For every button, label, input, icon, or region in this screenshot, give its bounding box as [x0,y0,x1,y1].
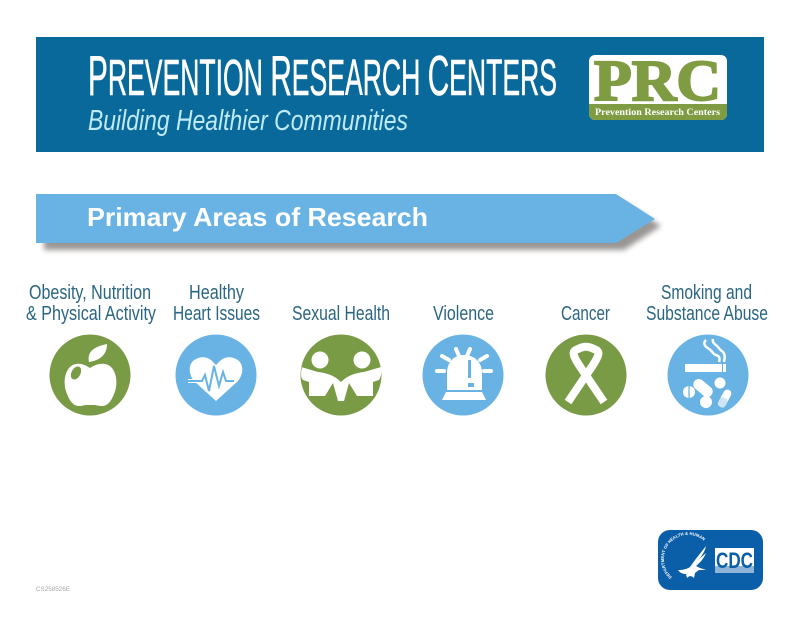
subtitle: Building Healthier Communities [88,105,408,137]
icon: siren [422,334,504,416]
publication code: CS258526E [36,586,71,593]
title: PREVENTION RESEARCH CENTERS [88,44,557,108]
column: cancer [546,303,626,416]
icon: apple [50,334,130,416]
column: violence [422,303,504,416]
label: obesity: & Physical Activity [26,303,156,325]
label: obesity: Obesity, Nutrition [29,282,151,304]
column: heart [173,282,260,416]
header banner [36,37,764,152]
label: heart: Healthy [189,282,244,304]
label: cancer: Cancer [561,303,610,325]
icon: cigarette and pills [668,334,748,416]
column: obesity [26,282,156,416]
icon: heart with pulse [176,334,256,416]
HHS seal: DEPARTMENT OF HEALTH & HUMAN SERVICES USA [661,532,706,579]
CDC mark: CDC [716,548,753,573]
label: violence: Violence [433,303,494,325]
PRC logo: PRC [594,48,721,113]
column: smoking [646,282,768,416]
label: sexual health: Sexual Health [292,303,390,325]
label: heart: Heart Issues [173,303,260,325]
section heading: Primary Areas of Research [87,202,428,232]
column: sexual health [292,303,390,416]
PRC logo: Prevention Research Centers [595,107,721,117]
section arrow banner [36,194,661,250]
label: smoking: Substance Abuse [646,303,768,325]
label: smoking: Smoking and [661,282,752,304]
icon: two people [300,334,382,416]
icon: ribbon [546,334,626,416]
